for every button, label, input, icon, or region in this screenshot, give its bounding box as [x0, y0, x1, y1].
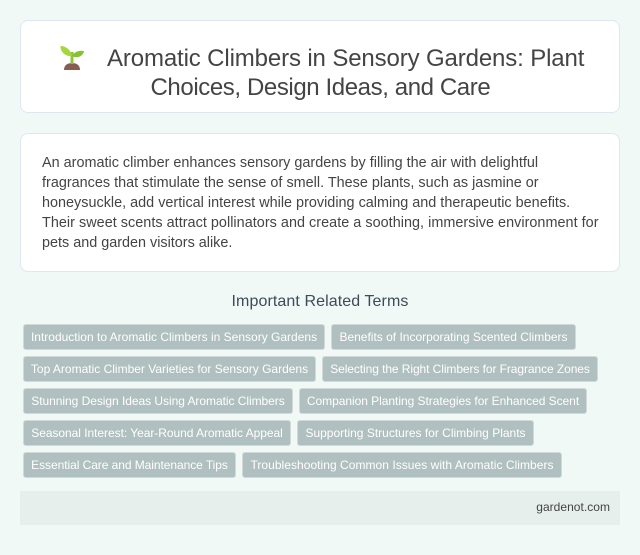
description text: pets and garden visitors alike. — [42, 234, 232, 250]
tag — [23, 452, 236, 478]
description text: honeysuckle, add vertical interest while providing calming and therapeutic benefits. — [42, 195, 570, 211]
description text: An aromatic climber enhances sensory gardens by filling the air with delightful — [42, 155, 538, 171]
tag: Introduction to Aromatic Climbers in Sensory Gardens — [31, 330, 317, 344]
tag — [322, 356, 598, 382]
tag: Seasonal Interest: Year-Round Aromatic Appeal — [31, 426, 283, 440]
panel: title card — [20, 20, 620, 113]
footer — [20, 491, 620, 525]
tag — [299, 388, 587, 414]
tag — [297, 420, 534, 446]
title — [107, 45, 584, 101]
tag — [23, 420, 291, 446]
description text: Their sweet scents attract pollinators and create a soothing, immersive environment for — [42, 215, 599, 231]
heading: related terms: Important Related Terms — [232, 293, 408, 310]
tag: Companion Planting Strategies for Enhanced Scent — [307, 394, 579, 408]
tag — [23, 324, 325, 350]
tag: Stunning Design Ideas Using Aromatic Climbers — [31, 394, 285, 408]
panel: description — [20, 133, 620, 272]
icon: seedling — [60, 46, 84, 70]
tag — [23, 388, 293, 414]
tag — [331, 324, 576, 350]
tag: Top Aromatic Climber Varieties for Sensory Gardens — [31, 362, 308, 376]
tag: Benefits of Incorporating Scented Climbers — [339, 330, 568, 344]
tag list — [23, 324, 598, 478]
tag: Troubleshooting Common Issues with Aromatic Climbers — [250, 458, 554, 472]
footer source text: gardenot.com — [536, 500, 610, 514]
tag — [242, 452, 562, 478]
tag — [23, 356, 316, 382]
tag: Supporting Structures for Climbing Plants — [305, 426, 526, 440]
title: Aromatic Climbers in Sensory Gardens: Plant — [107, 45, 584, 72]
description text — [42, 155, 599, 250]
title: Choices, Design Ideas, and Care — [150, 74, 490, 101]
tag: Essential Care and Maintenance Tips — [31, 458, 228, 472]
tag: Selecting the Right Climbers for Fragrance Zones — [330, 362, 590, 376]
description text: fragrances that stimulate the sense of smell. These plants, such as jasmine or — [42, 175, 539, 191]
